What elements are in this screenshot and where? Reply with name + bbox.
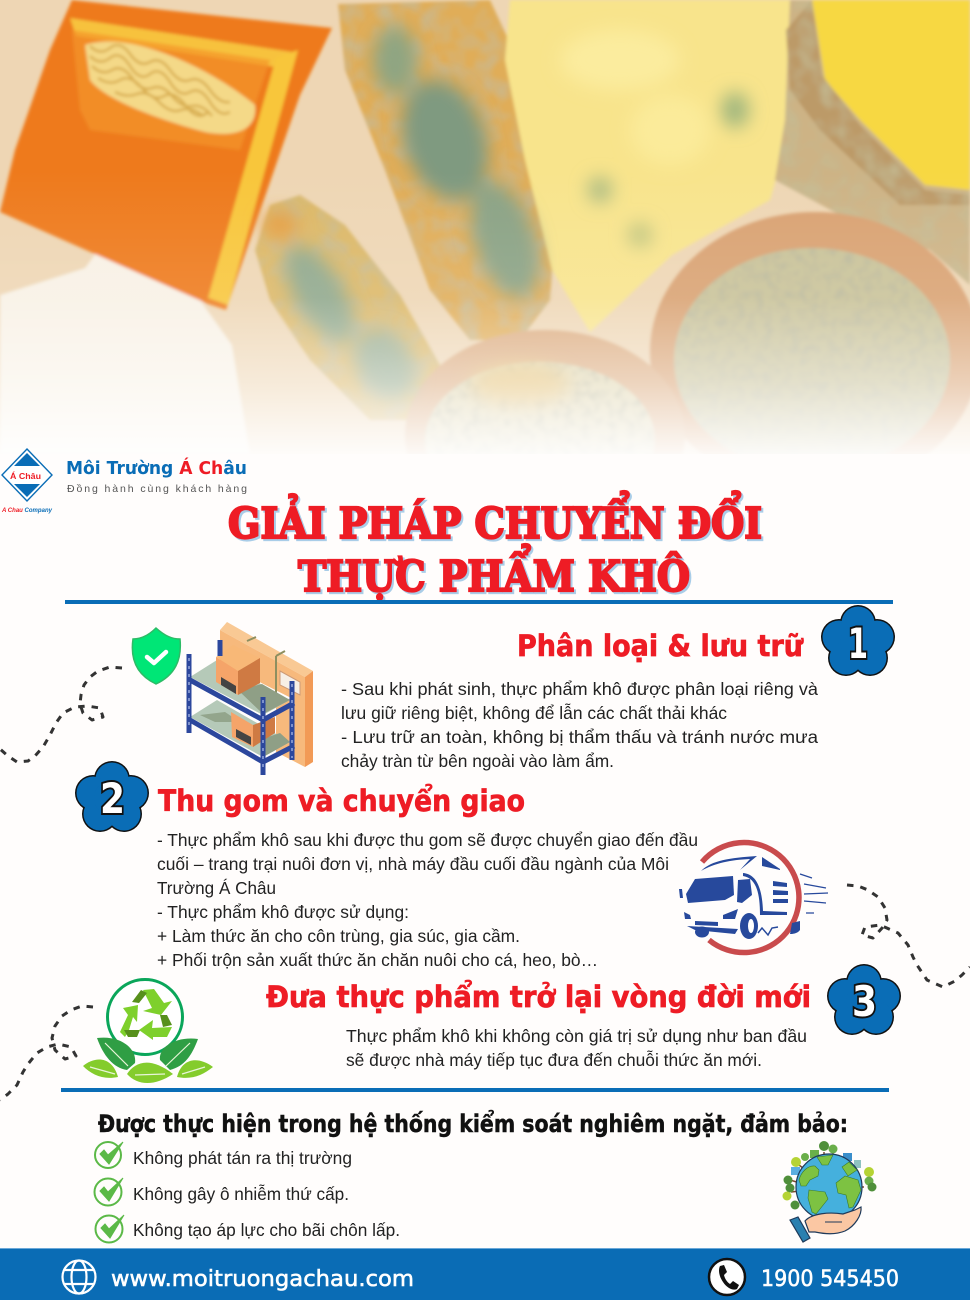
footer bar <box>0 1248 970 1300</box>
heading 1: Phân loại & lưu trữ <box>517 629 804 663</box>
logo diamond: Á Châu <box>10 471 41 481</box>
title <box>228 489 764 603</box>
body text 2: - Thực phẩm khô được sử dụng: <box>157 902 409 922</box>
phone number: 1900 545450 <box>761 1267 899 1292</box>
number badge 1: 1 <box>848 619 868 668</box>
sleeve <box>790 1217 810 1242</box>
body text 1: - Sau khi phát sinh, thực phẩm khô được phân loại riêng và <box>341 679 818 699</box>
icon: warehouse shelf with boxes <box>189 622 313 775</box>
body text 2 <box>157 830 698 970</box>
hand <box>805 1207 861 1234</box>
controls heading: Được thực hiện trong hệ thống kiểm soát nghiêm ngặt, đảm bảo: <box>98 1108 848 1138</box>
body text 1 <box>341 679 818 771</box>
title: THỰC PHẨM KHÔ <box>300 544 692 603</box>
body text 3 <box>346 1026 807 1070</box>
body text 1: chảy tràn từ bên ngoài vào làm ẩm. <box>341 751 614 771</box>
controls section <box>94 1108 848 1242</box>
body text 2: Trường Á Châu <box>157 878 276 898</box>
heading 2: Thu gom và chuyển giao <box>158 784 525 818</box>
icon: phone <box>709 1259 745 1295</box>
icon: delivery truck <box>679 843 828 953</box>
body text 2: cuối – trang trại nuôi đơn vị, nhà máy đầu cuối đầu ngành của Môi <box>157 854 669 874</box>
section 2 <box>75 761 698 970</box>
logo caption: A Chau Company <box>1 507 52 514</box>
body text 2: + Làm thức ăn cho côn trùng, gia súc, gia cầm. <box>157 926 520 946</box>
section 1 <box>341 605 895 771</box>
icon: earth in hand <box>782 1141 876 1242</box>
body text 2: - Thực phẩm khô sau khi được thu gom sẽ được chuyển giao đến đầu <box>157 830 698 850</box>
title: GIẢI PHÁP CHUYỂN ĐỔI <box>230 491 764 550</box>
section 3 <box>266 964 901 1070</box>
number badge 3: 3 <box>852 977 877 1026</box>
check item 1 <box>95 1142 352 1168</box>
lower shelf <box>190 700 290 757</box>
photo: moldy dry food <box>0 0 970 540</box>
upper box <box>216 645 260 671</box>
number badge 2: 2 <box>100 774 125 823</box>
company name: Môi Trường Á Châu <box>66 457 247 479</box>
check item 2 <box>94 1178 349 1206</box>
back carton <box>220 622 313 677</box>
icon: green shield <box>132 628 180 684</box>
body text 3: sẽ được nhà máy tiếp tục đưa đến chuỗi thức ăn mới. <box>346 1049 762 1070</box>
title: THỰC PHẨM KHÔ <box>298 542 690 601</box>
icon: recycling with leaves <box>83 980 213 1083</box>
lower white panel <box>0 454 970 1248</box>
heading 3: Đưa thực phẩm trở lại vòng đời mới <box>266 980 811 1014</box>
upper shelf <box>190 660 290 715</box>
check item 2: Không gây ô nhiễm thứ cấp. <box>133 1183 349 1204</box>
website: www.moitruongachau.com <box>111 1267 414 1292</box>
title: GIẢI PHÁP CHUYỂN ĐỔI <box>228 489 762 548</box>
number badge 2 <box>75 761 149 832</box>
logo diamond <box>2 449 52 501</box>
company logo <box>1 449 247 514</box>
blue frame <box>190 680 294 762</box>
trees <box>782 1141 876 1210</box>
number badge 1 <box>821 605 895 676</box>
check item 3: Không tạo áp lực cho bãi chôn lấp. <box>133 1220 400 1240</box>
globe <box>796 1154 862 1220</box>
slogan: Đồng hành cùng khách hàng <box>67 483 247 495</box>
lower box <box>231 712 253 747</box>
icon: globe <box>62 1260 96 1294</box>
dashed path right <box>847 885 970 987</box>
body text 3: Thực phẩm khô khi không còn giá trị sử dụng như ban đầu <box>346 1026 807 1046</box>
leaves <box>97 1038 135 1070</box>
body text 1: - Lưu trữ an toàn, không bị thẩm thấu và tránh nước mưa <box>341 727 818 747</box>
dashed path left lower <box>0 1006 93 1100</box>
body text 1: lưu giữ riêng biệt, không để lẫn các chất thải khác <box>341 702 727 723</box>
check item 1: Không phát tán ra thị trường <box>133 1148 352 1168</box>
number badge 3 <box>827 964 901 1035</box>
body text 2: + Phối trộn sản xuất thức ăn chăn nuôi cho cá, heo, bò… <box>157 950 598 970</box>
dashed path top left <box>0 667 122 762</box>
check item 3 <box>96 1215 400 1242</box>
